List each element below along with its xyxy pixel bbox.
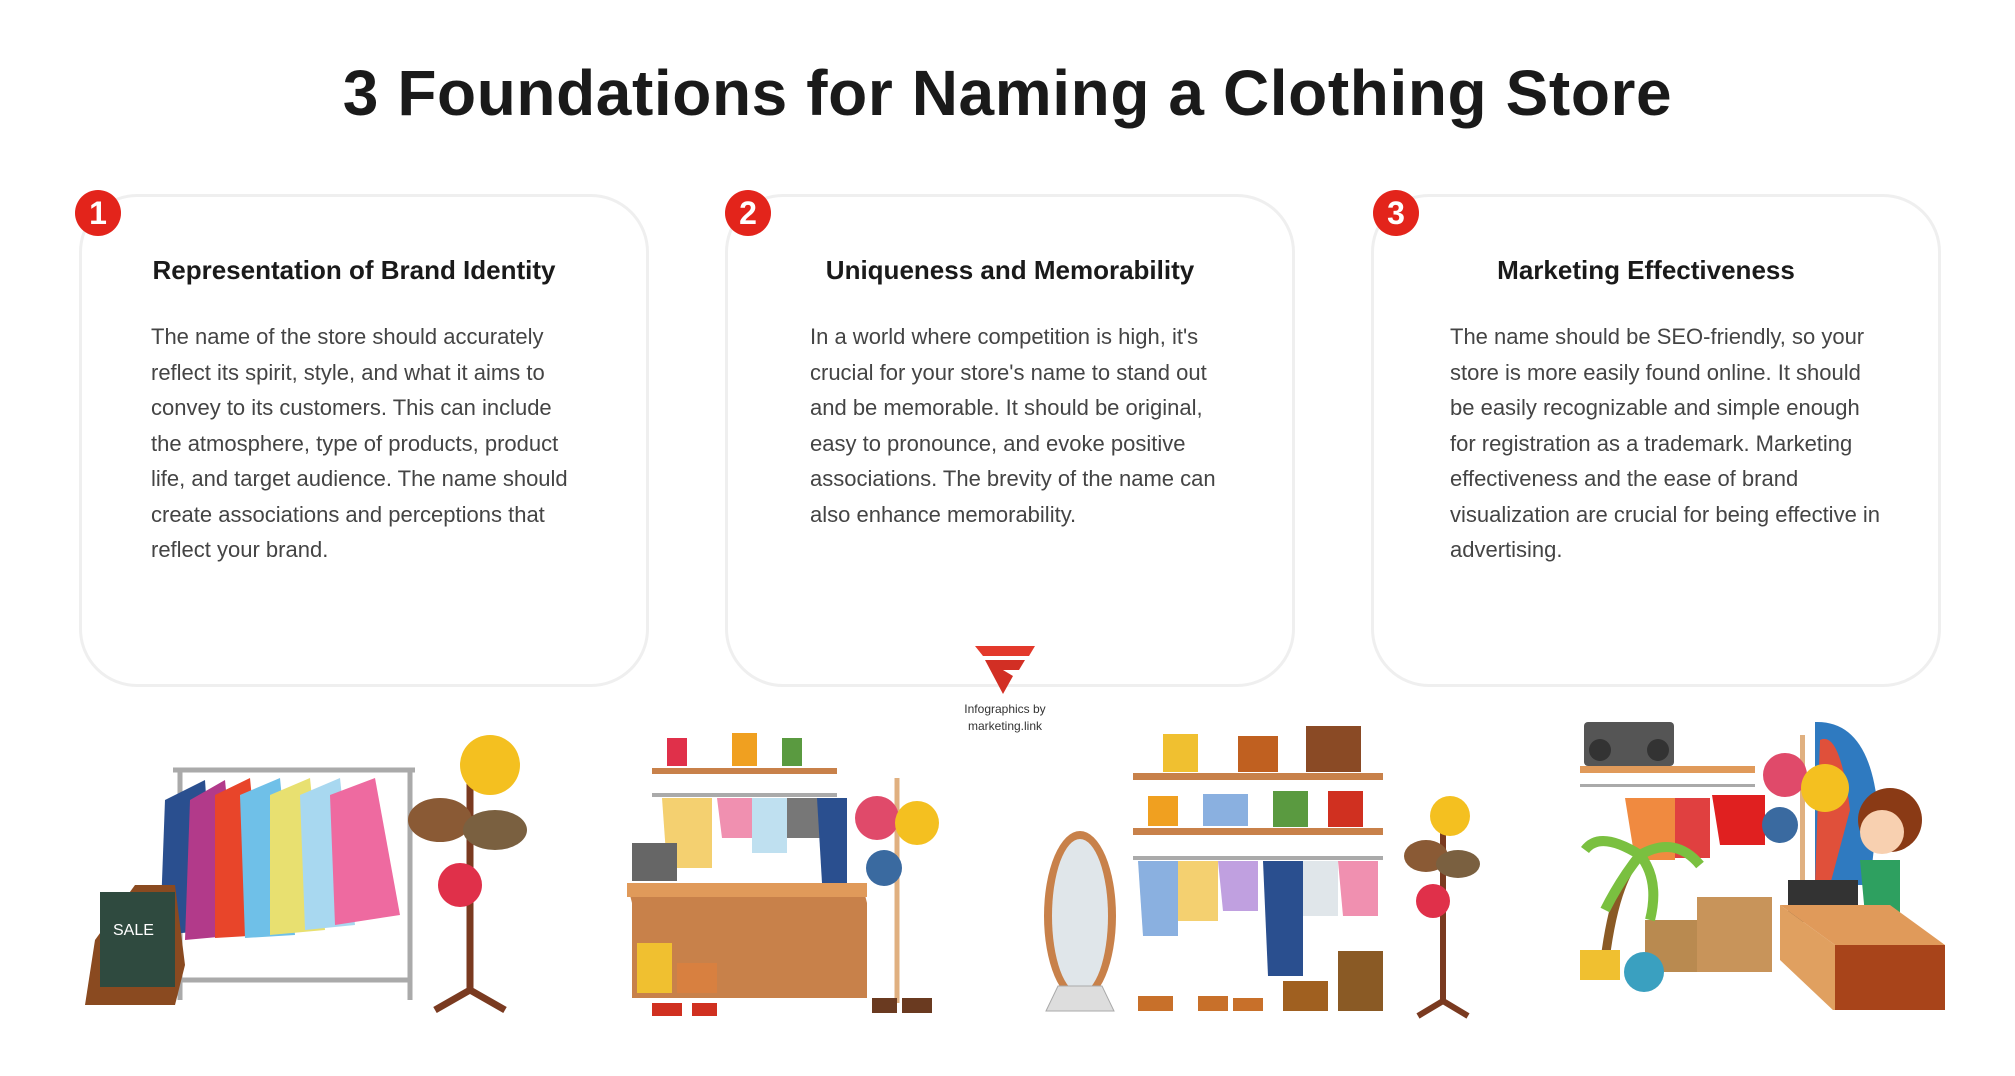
text block: advertising. [1450,537,1563,562]
badge 1 [75,190,121,236]
text block: easy to pronounce, and evoke positive [810,430,1185,456]
text block: reflect your brand. [151,537,328,562]
title: 3 Foundations for Naming a Clothing Store [343,57,1672,129]
text block: The name of the store should accurately [151,324,544,349]
text block: crucial for your store's name to stand out [810,360,1207,384]
heading: Uniqueness and Memorability [826,255,1194,285]
text block: the atmosphere, type of products, product [151,430,558,456]
text block: In a world where competition is high, it's [810,324,1198,349]
text block: life, and target audience. The name should [151,466,568,491]
icon: logo mark [975,646,1035,694]
text block [1450,324,1880,562]
badge 3: 3 [1387,195,1405,231]
text block: The name should be SEO-friendly, so your [1450,324,1864,349]
text block: create associations and perceptions that [151,502,545,526]
illustration: clothing rack with sale sign [85,735,527,1013]
text block: also enhance memorability. [810,502,1076,526]
illustration: beach store with cashier [1580,722,1945,1010]
badge 1: 1 [89,195,107,231]
heading: Representation of Brand Identity [152,255,556,285]
badge 2 [725,190,771,236]
logo: Infographics by [964,702,1046,716]
illustration: clothing rack with sale sign: SALE [113,922,154,939]
text block: convey to its customers. This can include [151,395,552,420]
text block: associations. The brevity of the name can [810,466,1216,491]
badge 2: 2 [739,195,757,231]
panel: marketing [1371,194,1941,687]
text block: visualization are crucial for being effective in [1450,502,1880,526]
heading: Marketing Effectiveness [1497,255,1795,285]
logo [964,646,1046,733]
text block: and be memorable. It should be original, [810,395,1203,420]
panel: uniqueness [725,194,1295,687]
text block: effectiveness and the ease of brand [1450,466,1798,491]
text block: store is more easily found online. It should [1450,360,1861,384]
text block: reflect its spirit, style, and what it aims to [151,360,545,384]
badge 3 [1373,190,1419,236]
text block [810,324,1216,526]
text block: be easily recognizable and simple enough [1450,395,1860,420]
text block: for registration as a trademark. Marketing [1450,430,1852,456]
illustration: desk with shelf and clothes [627,733,939,1016]
text block [151,324,568,562]
panel: brand identity [79,194,649,687]
illustration: shelves, mirror and rack [1044,726,1480,1019]
logo: marketing.link [968,719,1042,733]
